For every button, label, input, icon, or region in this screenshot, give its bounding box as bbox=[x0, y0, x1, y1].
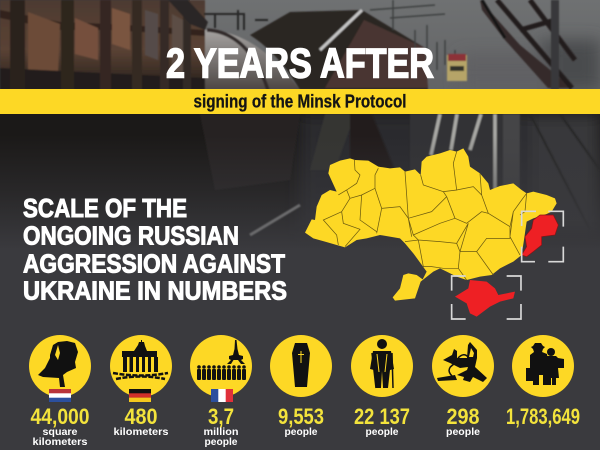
map of Ukraine bbox=[305, 148, 563, 319]
stat: Berlin Wall length: kilometers bbox=[114, 426, 169, 438]
stat: Netherlands area bbox=[29, 335, 91, 448]
stat: people wounded: people bbox=[366, 426, 399, 438]
stat: Paris population: people bbox=[204, 436, 238, 448]
title: 2 YEARS AFTER bbox=[166, 40, 434, 86]
map: occupied Crimea bbox=[455, 280, 515, 317]
map: yellow regions bbox=[305, 148, 557, 301]
main heading: AGGRESSION AGAINST bbox=[23, 248, 285, 278]
stat: MH17 victims: people bbox=[446, 426, 480, 438]
map: occupied Donbas bbox=[522, 215, 558, 257]
stat: people wounded: 22 137 bbox=[354, 404, 410, 429]
stat: displaced people bbox=[506, 335, 580, 429]
main heading: UKRAINE IN NUMBERS bbox=[23, 276, 287, 306]
map: oblast borders bbox=[323, 152, 527, 280]
stat: Paris population: 3,7 bbox=[208, 404, 234, 429]
stat: Paris population bbox=[190, 335, 252, 448]
map: focus bracket around Crimea bbox=[452, 276, 521, 319]
stat: people killed bbox=[270, 335, 332, 438]
stat: people killed: 9,553 bbox=[278, 404, 324, 429]
main heading: SCALE OF THE bbox=[23, 193, 187, 223]
stat: people wounded bbox=[351, 335, 413, 438]
stat: Berlin Wall length: 480 bbox=[124, 404, 158, 429]
main heading bbox=[23, 193, 287, 306]
stat: people killed: people bbox=[284, 426, 318, 438]
map: focus bracket around Donbas bbox=[522, 211, 563, 262]
yellow banner with subtitle bbox=[0, 89, 600, 114]
stat: MH17 victims: 298 bbox=[446, 404, 480, 429]
yellow banner with subtitle: signing of the Minsk Protocol bbox=[194, 92, 406, 112]
stat: Berlin Wall length bbox=[110, 335, 172, 438]
main heading: ONGOING RUSSIAN bbox=[23, 220, 239, 250]
stat: Netherlands area: kilometers bbox=[32, 436, 88, 448]
stat: Paris population: million bbox=[204, 426, 238, 438]
stat: Netherlands area: square bbox=[42, 426, 78, 438]
stat: MH17 victims bbox=[432, 335, 494, 438]
stat: Netherlands area: 44,000 bbox=[30, 404, 90, 429]
